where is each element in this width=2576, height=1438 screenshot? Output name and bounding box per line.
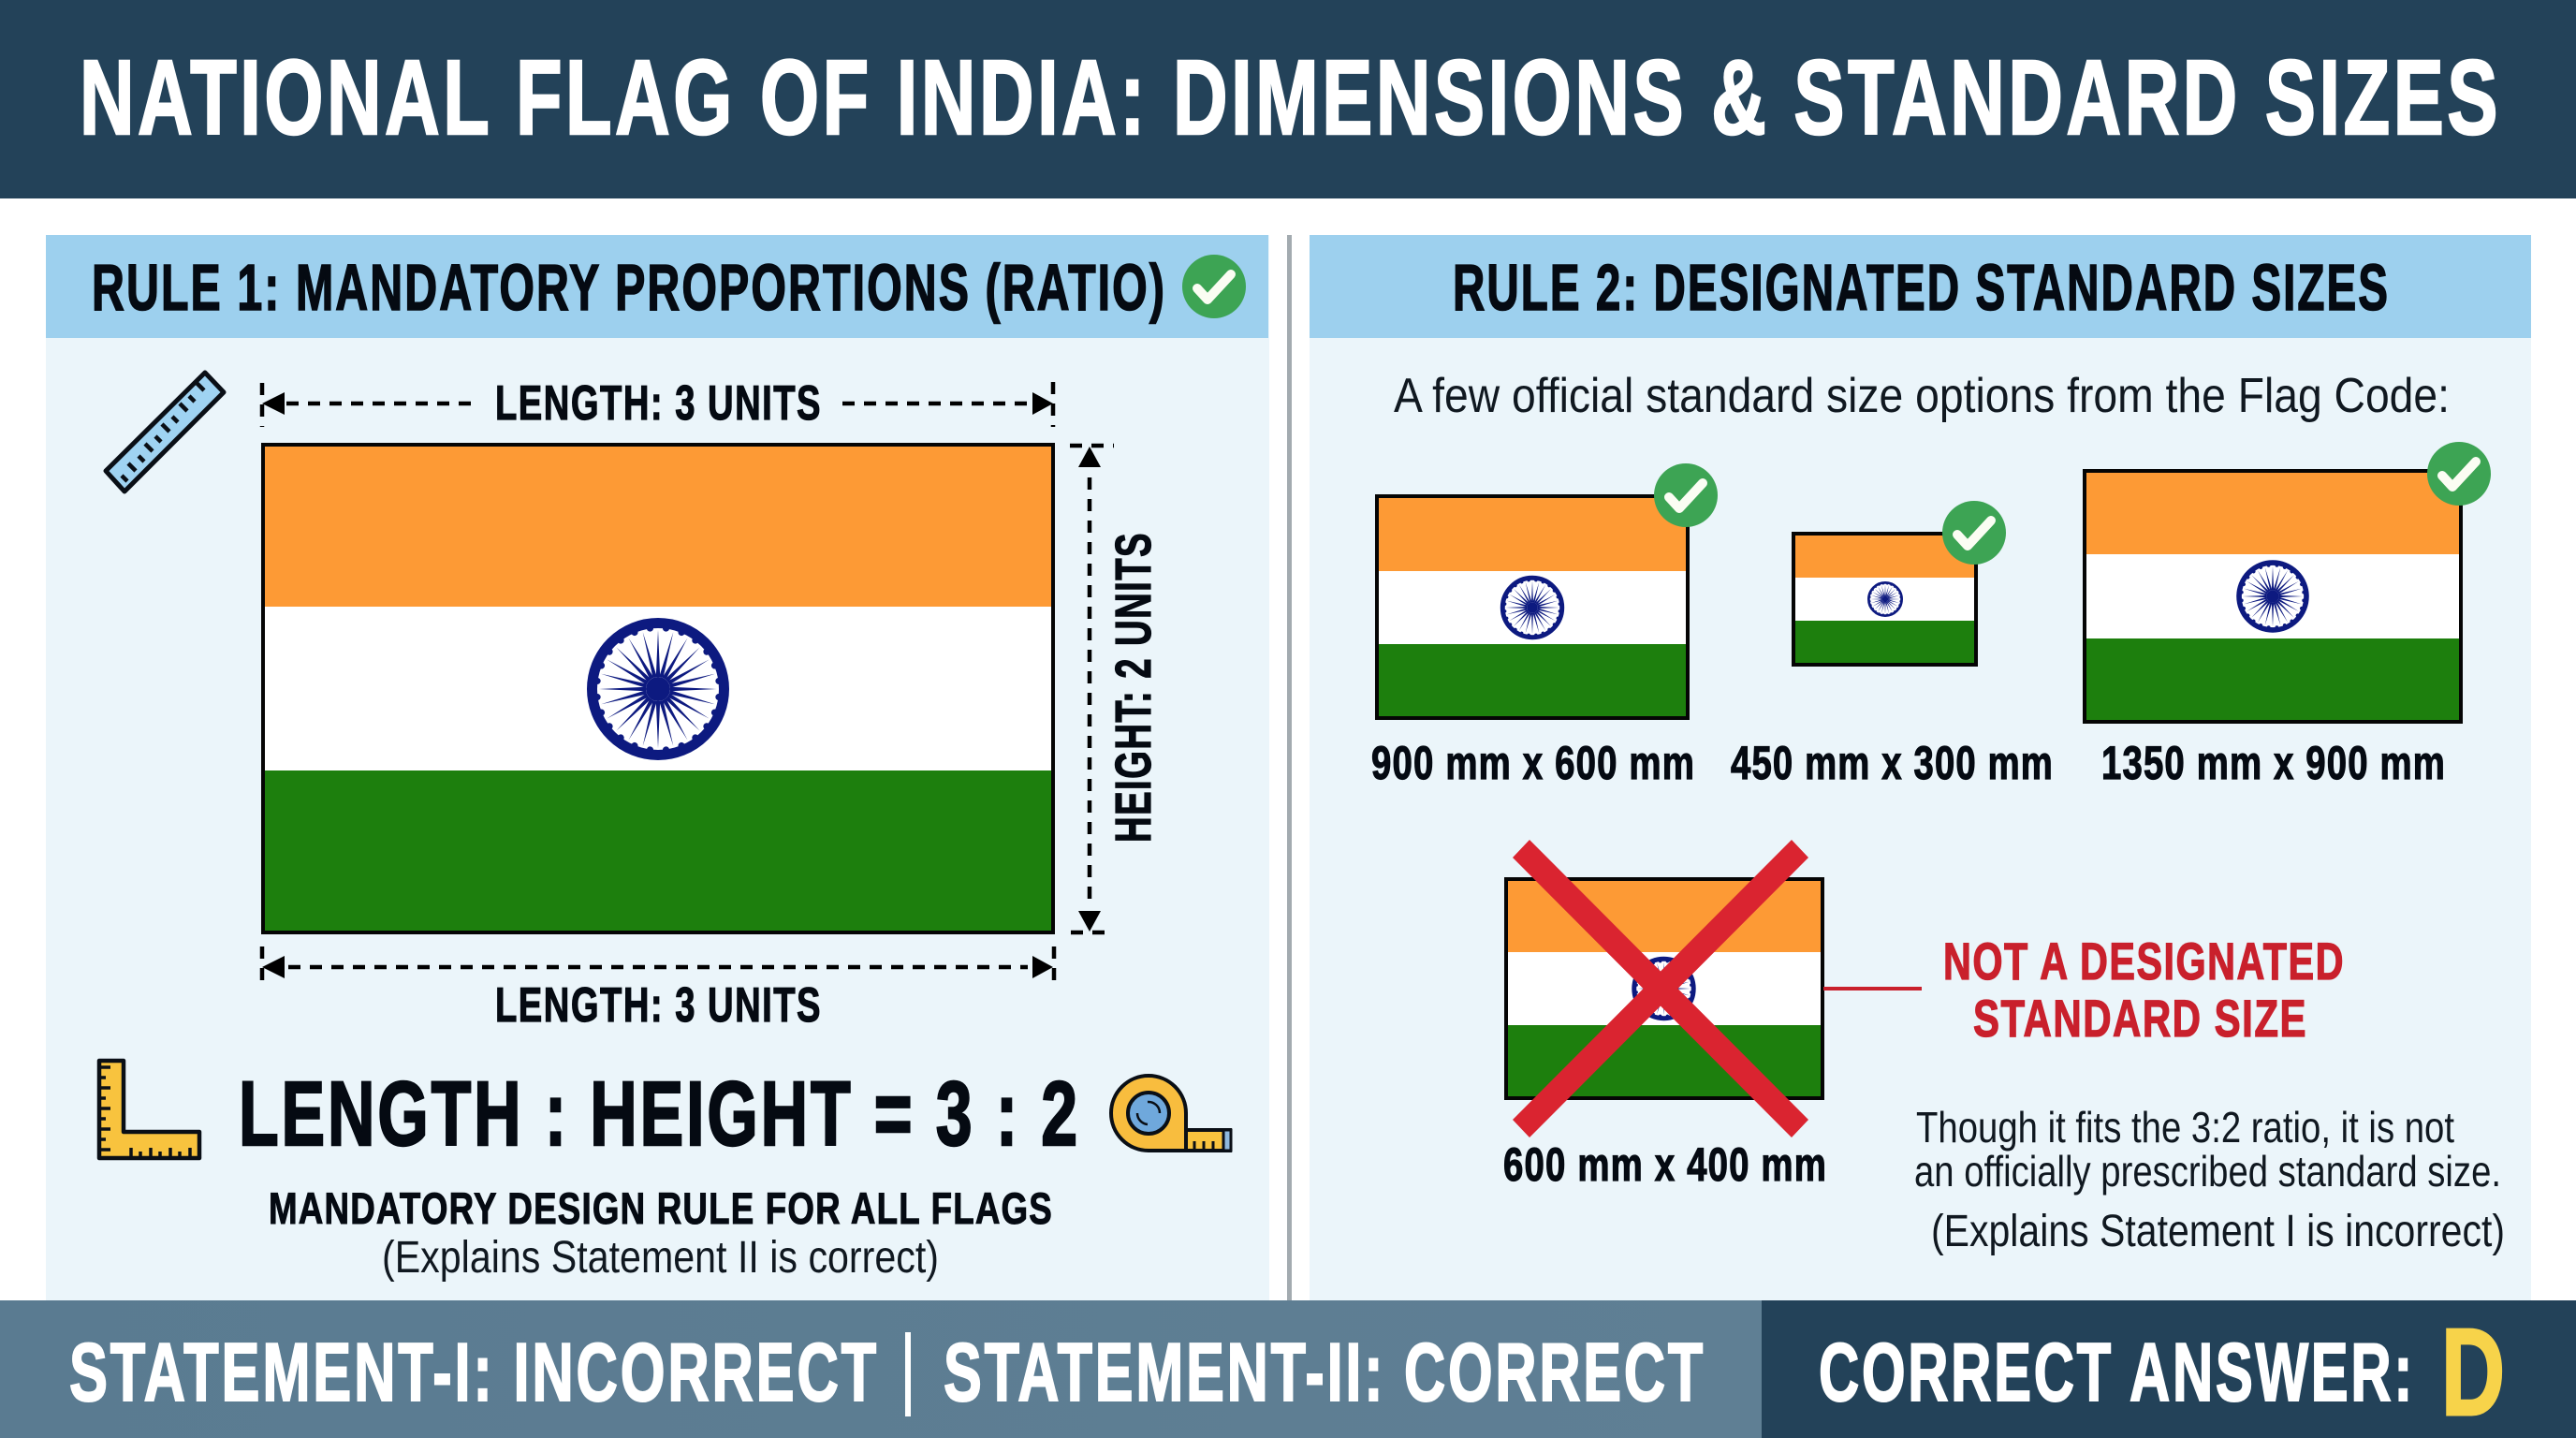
icon: check: [1654, 463, 1718, 527]
flag 450 x 300: [1792, 501, 2006, 667]
top length dimension: LENGTH: 3 UNITS: [495, 376, 822, 431]
red cross: [1513, 840, 1808, 1137]
height dimension: [1070, 446, 1162, 932]
label 1350 x 900: 1350 mm x 900 mm: [2101, 737, 2446, 789]
label 900 x 600: 900 mm x 600 mm: [1371, 737, 1695, 789]
bottom length dimension: [262, 946, 1054, 1033]
correct answer box: [1762, 1300, 2576, 1438]
crossed-out flag 600 x 400: [1504, 840, 1824, 1137]
statement II note: (Explains Statement II is correct): [382, 1233, 939, 1283]
red leader line: [1823, 987, 1922, 990]
label 600 x 400: 600 mm x 400 mm: [1503, 1138, 1827, 1191]
statements bar: STATEMENT-II: CORRECT: [944, 1326, 1705, 1418]
panel: rule 2 designated standard sizes: [1310, 235, 2531, 1300]
icon: check: [1942, 501, 2006, 565]
main flag: [261, 443, 1055, 934]
top length dimension: [262, 376, 1053, 431]
rule 1 heading: [46, 235, 1268, 338]
icon: carpenter square: [99, 1061, 199, 1158]
ratio equation: LENGTH : HEIGHT = 3 : 2: [239, 1063, 1080, 1165]
not designated callout: [1943, 932, 2345, 1048]
ashoka chakra: [592, 624, 724, 755]
explanation note: Though it fits the 3:2 ratio, it is not: [1916, 1103, 2454, 1152]
rule 1 heading: RULE 1: MANDATORY PROPORTIONS (RATIO): [92, 251, 1166, 324]
icon: ruler: [106, 373, 224, 492]
subheading: A few official standard size options from the Flag Code:: [1394, 369, 2450, 423]
correct answer box: D: [2441, 1303, 2505, 1438]
title banner: [0, 0, 2576, 198]
explanation note: [1914, 1103, 2505, 1256]
icon: green check: [1182, 255, 1246, 318]
rule 2 heading: [1310, 235, 2531, 338]
panel: rule 1 mandatory proportions: [46, 235, 1269, 1300]
icon: measuring tape: [1111, 1076, 1231, 1151]
flag 1350 x 900: [2083, 442, 2491, 724]
bottom length dimension: LENGTH: 3 UNITS: [495, 978, 822, 1033]
height dimension: HEIGHT: 2 UNITS: [1105, 532, 1162, 843]
not designated callout: NOT A DESIGNATED: [1943, 932, 2345, 990]
not designated callout: STANDARD SIZE: [1973, 989, 2307, 1048]
statements bar: STATEMENT-I: INCORRECT: [69, 1326, 879, 1418]
statements bar: [0, 1300, 1762, 1438]
icon: check: [2427, 442, 2491, 506]
flag 900 x 600: [1375, 463, 1718, 720]
panel divider: [1287, 235, 1292, 1300]
mandatory rule caption: MANDATORY DESIGN RULE FOR ALL FLAGS: [269, 1183, 1053, 1233]
label 450 x 300: 450 mm x 300 mm: [1731, 737, 2054, 789]
